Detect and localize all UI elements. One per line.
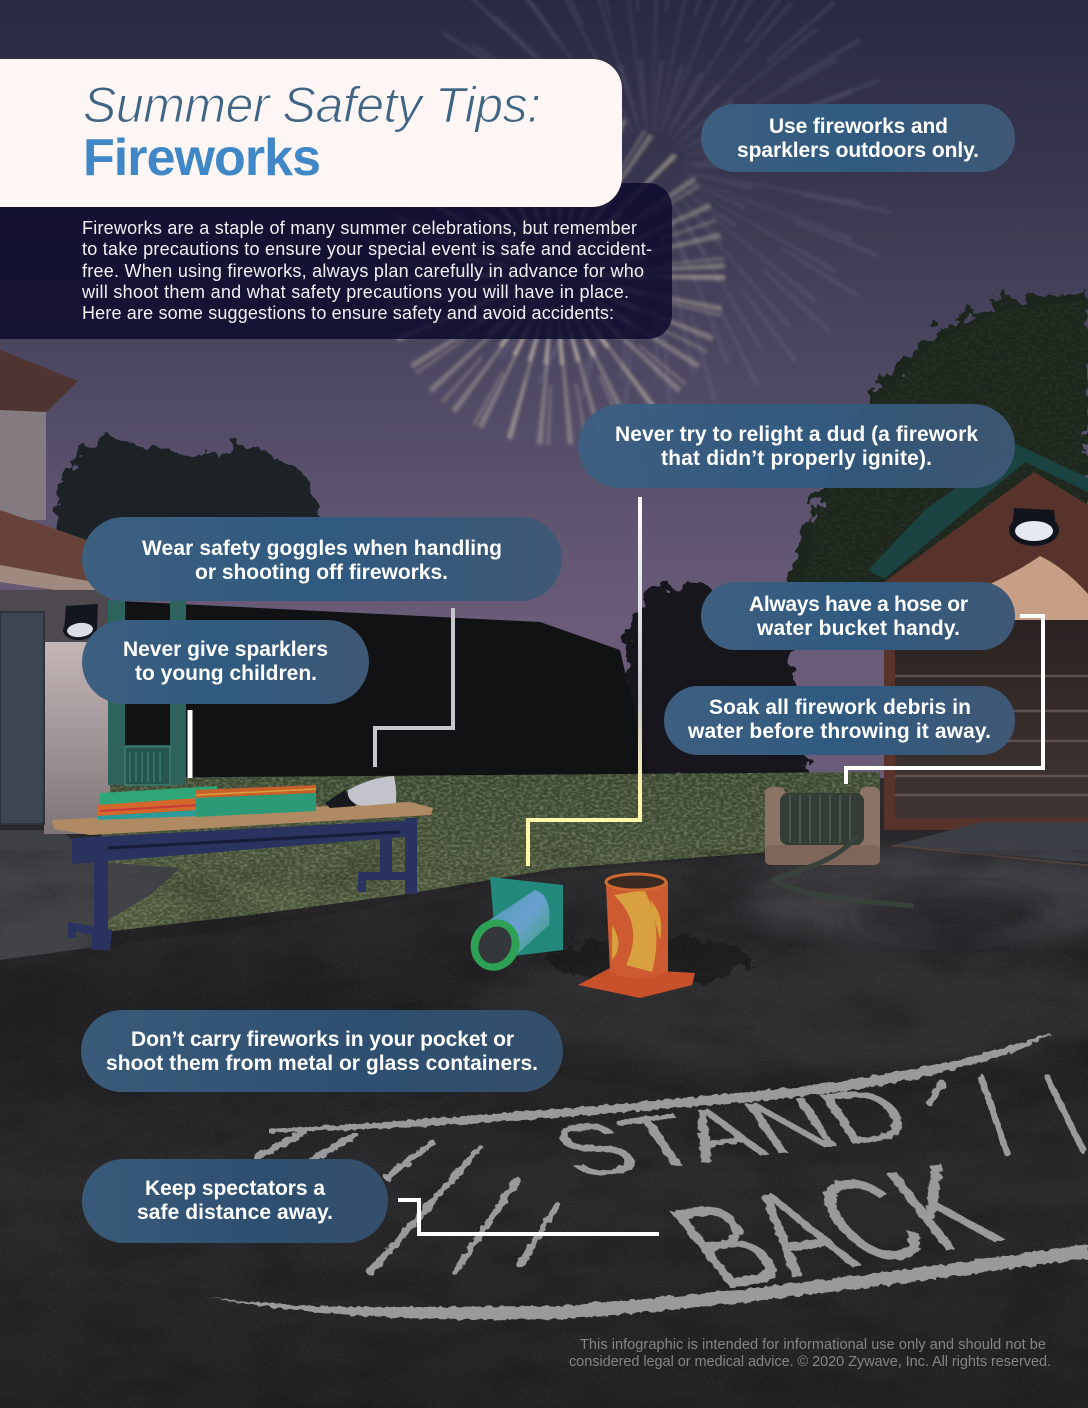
pill: sparklers xyxy=(82,620,369,704)
firework boxes on bench xyxy=(97,785,316,820)
intro text: to take precautions to ensure your special event is safe and accident- xyxy=(82,239,652,259)
pill: relight a dud: that didn’t properly ignite). xyxy=(661,447,932,470)
title line 1: Summer Safety Tips: xyxy=(83,77,541,133)
chalk: bottom arc xyxy=(205,1244,1088,1320)
intro text: Here are some suggestions to ensure safety and avoid accidents: xyxy=(82,303,614,323)
pill: safety goggles: or shooting off fireworks. xyxy=(195,561,448,584)
footer disclaimer: This infographic is intended for informational use only and should not be xyxy=(580,1337,1046,1353)
upper roof xyxy=(0,350,78,412)
asphalt shadow patch xyxy=(855,891,1045,939)
left house xyxy=(0,350,186,834)
porch rail xyxy=(125,747,170,785)
chalk text: STAND: STAND xyxy=(534,1073,930,1194)
left porch post frame xyxy=(108,600,186,785)
chalk: hatch marks xyxy=(257,1077,1083,1272)
pill: sparklers: Never give sparklers xyxy=(123,638,328,661)
pill: pocket and containers: shoot them from metal or glass containers. xyxy=(106,1052,538,1075)
garage wall xyxy=(884,472,1088,830)
intro text: will shoot them and what safety precautions you will have in place. xyxy=(81,282,629,302)
bench legs xyxy=(68,818,417,950)
upper wall xyxy=(0,400,46,520)
asphalt light patch right xyxy=(750,852,1088,948)
red firework tube xyxy=(578,874,695,998)
garage door xyxy=(895,620,1088,818)
left lamp xyxy=(62,604,98,642)
pill: relight a dud xyxy=(578,404,1015,488)
garage sill xyxy=(891,846,1088,866)
connector: dud xyxy=(528,497,640,866)
chalk: top arc xyxy=(270,1034,1050,1132)
goggles xyxy=(325,776,396,808)
pill: spectators: safe distance away. xyxy=(137,1201,333,1224)
lit lower wall xyxy=(44,642,110,834)
intro text: free. When using fireworks, always plan carefully in advance for who xyxy=(82,261,644,281)
house door xyxy=(0,612,44,824)
fireworks burst: upper xyxy=(450,0,850,365)
bench rail gap xyxy=(108,832,400,848)
pill: relight a dud: Never try to relight a dud (a firework xyxy=(615,423,978,446)
pill: outdoors: sparklers outdoors only. xyxy=(737,139,979,162)
bench top xyxy=(52,802,433,835)
title panel xyxy=(0,59,622,207)
garage roof trim xyxy=(868,444,1088,579)
ground: asphalt xyxy=(0,778,1088,1408)
lawn texture xyxy=(100,772,880,932)
background: night sky xyxy=(0,0,1088,780)
footer disclaimer: considered legal or medical advice. © 2020 Zywave, Inc. All rights reserved. xyxy=(569,1354,1051,1370)
connector: hose xyxy=(846,616,1043,784)
pill: soak debris: water before throwing it away. xyxy=(687,720,991,743)
pill: outdoors xyxy=(701,104,1015,172)
pill: hose: water bucket handy. xyxy=(756,617,960,640)
hedge xyxy=(100,600,650,780)
pill: safety goggles: Wear safety goggles when handling xyxy=(142,537,502,560)
right lamp xyxy=(1009,508,1059,546)
roof light band xyxy=(0,565,110,598)
intro text xyxy=(81,218,652,323)
fireworks burst: lower xyxy=(415,135,695,415)
lamp light hood xyxy=(985,556,1088,620)
title line 2: Fireworks xyxy=(83,129,321,187)
pill: soak debris xyxy=(664,686,1015,755)
pill: soak debris: Soak all firework debris in xyxy=(709,696,971,719)
connector: spectators xyxy=(398,1200,659,1234)
asphalt texture xyxy=(0,850,1088,1408)
pill: pocket and containers: Don’t carry fireworks in your pocket or xyxy=(131,1028,514,1051)
lawn xyxy=(100,772,880,932)
pill: outdoors: Use fireworks and xyxy=(769,115,948,138)
middle background tree xyxy=(625,580,810,780)
left concrete walkway xyxy=(0,830,180,960)
intro text: Fireworks are a staple of many summer celebrations, but remember xyxy=(82,218,637,238)
footer disclaimer xyxy=(569,1337,1051,1370)
intro panel xyxy=(0,183,672,339)
lower wall dark top xyxy=(0,590,110,650)
asphalt blotches xyxy=(0,850,1088,1408)
pill: hose: Always have a hose or xyxy=(749,593,968,616)
pill: sparklers: to young children. xyxy=(135,662,317,685)
chalk text: BACK: BACK xyxy=(644,1139,1027,1314)
asphalt stain under cones xyxy=(550,936,750,984)
right tree xyxy=(790,290,1088,640)
pill: spectators: Keep spectators a xyxy=(145,1177,325,1200)
connector: sparklers xyxy=(188,710,192,778)
hose reel xyxy=(765,787,914,906)
pill: hose xyxy=(701,582,1015,650)
asphalt foreground xyxy=(0,845,1088,1408)
garage apron xyxy=(891,822,1088,862)
fallen firework tube xyxy=(462,877,563,979)
bench xyxy=(52,802,433,950)
right garage xyxy=(868,444,1088,866)
connector: goggles xyxy=(375,608,453,767)
pill: safety goggles xyxy=(82,517,562,601)
pill: pocket and containers xyxy=(81,1010,563,1092)
left background tree xyxy=(55,432,322,560)
pill: spectators xyxy=(82,1159,388,1243)
lower roof xyxy=(0,510,110,605)
asphalt mid light band xyxy=(470,950,1088,1070)
